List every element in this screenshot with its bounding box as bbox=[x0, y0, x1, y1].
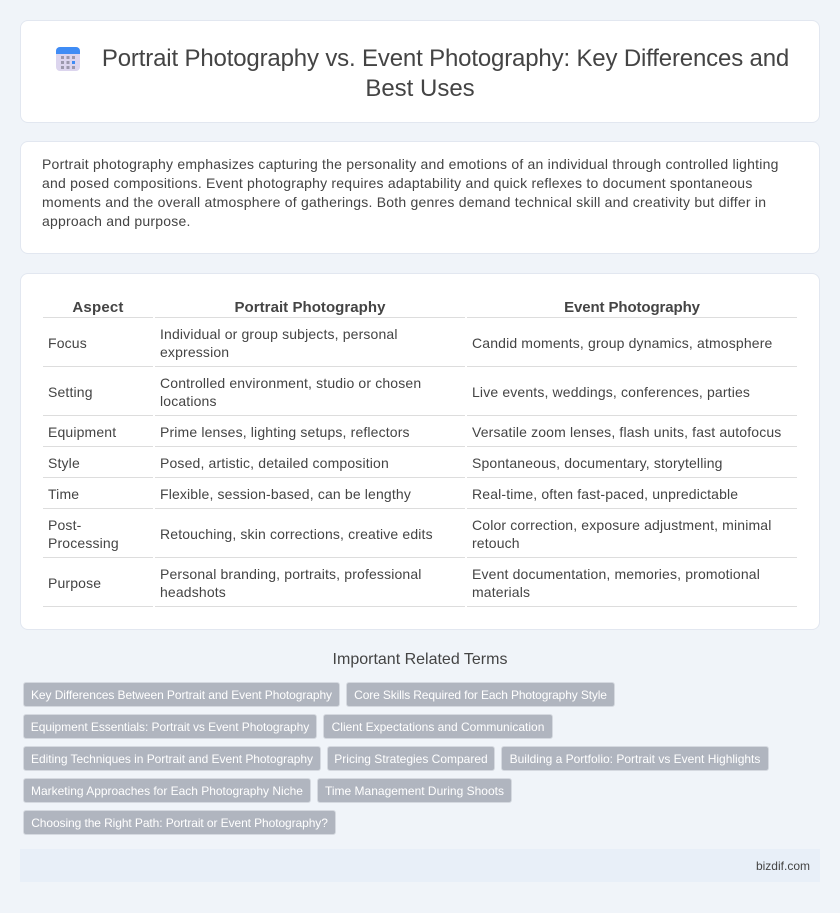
row: Purpose: Purpose bbox=[48, 575, 101, 591]
row: Time bbox=[48, 486, 738, 502]
row: Time: Flexible, session-based, can be lengthy bbox=[160, 486, 411, 502]
intro text bbox=[42, 156, 779, 229]
row: Equipment bbox=[48, 424, 781, 440]
tag list: related terms: Client Expectations and Communication bbox=[332, 720, 544, 734]
table header bbox=[72, 299, 700, 316]
icon: calendar bbox=[56, 47, 80, 71]
tag list: related terms: Equipment Essentials: Portrait vs Event Photography bbox=[31, 720, 309, 734]
row: Focus: Focus bbox=[48, 335, 87, 351]
table header: Aspect bbox=[72, 299, 124, 316]
row: Time: Time bbox=[48, 486, 79, 502]
tag list: related terms: Editing Techniques in Portrait and Event Photography bbox=[31, 752, 313, 766]
title bbox=[102, 45, 789, 102]
row: Post-Processing: Post- bbox=[48, 517, 81, 533]
row: Focus: expression bbox=[160, 344, 229, 360]
row: Style bbox=[48, 455, 723, 471]
row: Equipment: Versatile zoom lenses, flash units, fast autofocus bbox=[472, 424, 781, 440]
row: Setting: locations bbox=[160, 393, 217, 409]
table header: Event Photography bbox=[564, 299, 700, 316]
row: Style: Spontaneous, documentary, storytelling bbox=[472, 455, 723, 471]
row: Equipment: Prime lenses, lighting setups, reflectors bbox=[160, 424, 410, 440]
intro text: approach and purpose. bbox=[42, 213, 191, 229]
row: Post-Processing bbox=[48, 517, 771, 551]
row: Post-Processing: Processing bbox=[48, 535, 119, 551]
row: Time: Real-time, often fast-paced, unpredictable bbox=[472, 486, 738, 502]
heading: related terms: Important Related Terms bbox=[333, 651, 507, 668]
tag list: related terms: Building a Portfolio: Portrait vs Event Highlights bbox=[510, 752, 760, 766]
panel: title header bbox=[20, 20, 820, 123]
row: Equipment: Equipment bbox=[48, 424, 116, 440]
row: Purpose: materials bbox=[472, 584, 530, 600]
title: Best Uses bbox=[365, 75, 475, 102]
row: Style: Posed, artistic, detailed composition bbox=[160, 455, 389, 471]
tag list: related terms: Marketing Approaches for Each Photography Niche bbox=[31, 784, 303, 798]
row: Setting bbox=[48, 375, 750, 409]
table header: Portrait Photography bbox=[234, 299, 386, 316]
row: Purpose: headshots bbox=[160, 584, 226, 600]
row: Focus: Candid moments, group dynamics, atmosphere bbox=[472, 335, 772, 351]
panel: intro paragraph bbox=[20, 141, 820, 254]
tag list: related terms: Core Skills Required for Each Photography Style bbox=[354, 688, 607, 702]
row: Purpose bbox=[48, 566, 760, 600]
row: Focus: Individual or group subjects, personal bbox=[160, 326, 398, 342]
row: Focus bbox=[48, 326, 772, 360]
row: Setting: Controlled environment, studio or chosen bbox=[160, 375, 421, 391]
row: Post-Processing: Retouching, skin corrections, creative edits bbox=[160, 526, 433, 542]
intro text: moments and the overall atmosphere of gatherings. Both genres demand technical skill and creativity but differ in bbox=[42, 194, 766, 210]
tag list: related terms: Pricing Strategies Compared bbox=[334, 752, 488, 766]
row: Style: Style bbox=[48, 455, 80, 471]
row: Setting: Setting bbox=[48, 384, 93, 400]
tag list: related terms: Choosing the Right Path: Portrait or Event Photography? bbox=[31, 816, 328, 830]
intro text: Portrait photography emphasizes capturing the personality and emotions of an individual through controlled lighting bbox=[42, 156, 779, 172]
row: Post-Processing: retouch bbox=[472, 535, 520, 551]
row: Post-Processing: Color correction, exposure adjustment, minimal bbox=[472, 517, 771, 533]
tag list: related terms bbox=[23, 682, 769, 835]
title: Portrait Photography vs. Event Photography: Key Differences and bbox=[102, 45, 789, 72]
row: Setting: Live events, weddings, conferences, parties bbox=[472, 384, 750, 400]
footer bar bbox=[20, 849, 820, 882]
row: Purpose: Personal branding, portraits, professional bbox=[160, 566, 422, 582]
tag list: related terms: Time Management During Shoots bbox=[325, 784, 504, 798]
panel: comparison table bbox=[20, 273, 820, 630]
tag list: related terms: Key Differences Between Portrait and Event Photography bbox=[31, 688, 332, 702]
footer source text: bizdif.com bbox=[756, 859, 810, 873]
row: Purpose: Event documentation, memories, promotional bbox=[472, 566, 760, 582]
intro text: and posed compositions. Event photography requires adaptability and quick reflexes to document spontaneous bbox=[42, 175, 753, 191]
